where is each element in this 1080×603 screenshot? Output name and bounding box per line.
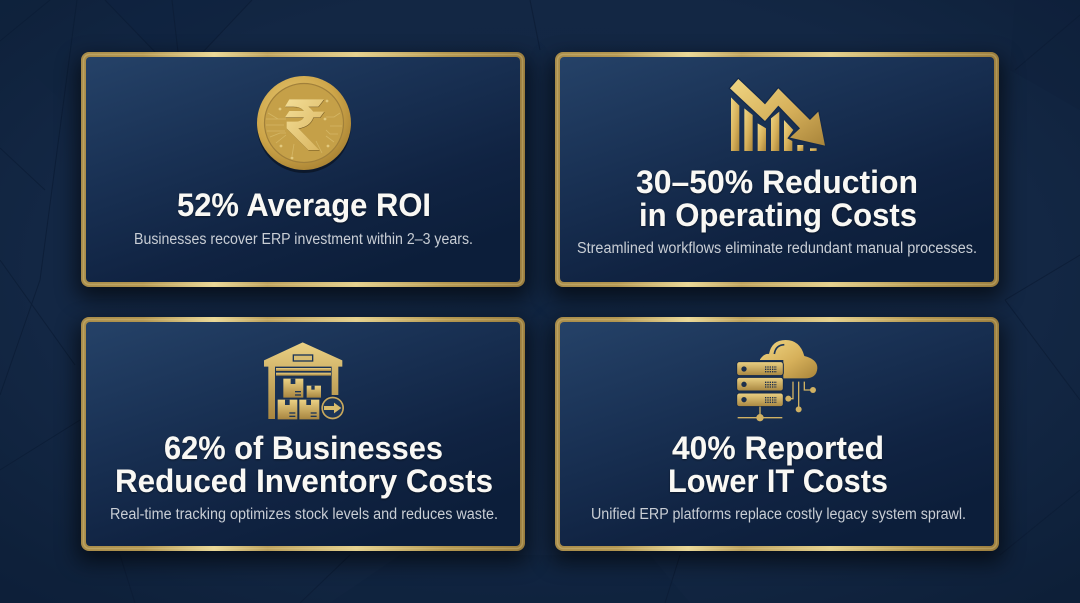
- panel: 52% average ROI: [77, 52, 529, 298]
- icon: warehouse: [264, 342, 345, 421]
- heading: in Operating Costs: [639, 197, 917, 233]
- panel: 62% reduced inventory costs: [77, 317, 529, 562]
- description: Real-time tracking optimizes stock levels and reduces waste.: [110, 506, 498, 523]
- heading: 62% of Businesses: [164, 430, 443, 466]
- panel: 30-50% reduction in operating costs: [551, 52, 1003, 298]
- icon: falling cost chart: [730, 79, 825, 151]
- description: Businesses recover ERP investment within 2–3 years.: [134, 231, 473, 248]
- panel: 40% lower IT costs: [551, 317, 1003, 562]
- heading: 52% Average ROI: [177, 187, 431, 223]
- description: Streamlined workflows eliminate redundant manual processes.: [577, 240, 977, 257]
- icon: server and cloud: [737, 340, 817, 421]
- heading: Lower IT Costs: [668, 463, 888, 499]
- heading: Reduced Inventory Costs: [115, 463, 493, 499]
- description: Unified ERP platforms replace costly legacy system sprawl.: [591, 506, 966, 523]
- heading: 30–50% Reduction: [636, 164, 918, 200]
- heading: 40% Reported: [672, 430, 884, 466]
- icon: rupee coin: [257, 76, 351, 173]
